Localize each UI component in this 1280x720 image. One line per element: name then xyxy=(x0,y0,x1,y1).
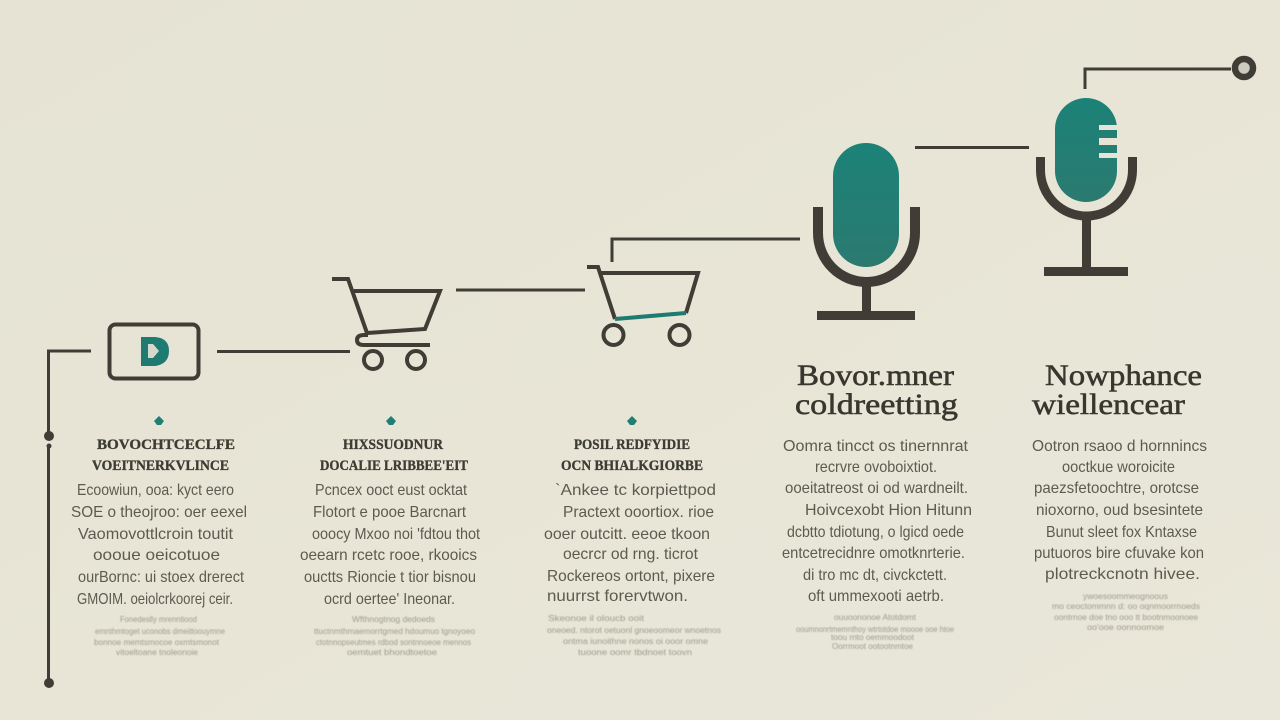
text block: step four footnote: toou rnto oemmoodoot xyxy=(831,633,915,642)
connector: cart two to microphone one xyxy=(612,239,800,262)
text block: step five footnote: oo'ooe oonnoomoe xyxy=(1087,623,1165,632)
text block: step three body: nuurrst forervtwon. xyxy=(547,588,688,605)
text block: step two body: ouctts Rioncie t tior bisnou xyxy=(304,569,476,586)
text block: step two footnote: Wfthnogtnog dedoeds xyxy=(352,615,435,624)
step column four xyxy=(782,359,972,651)
text block: step four body xyxy=(782,438,972,605)
text block: step four body: di tro mc dt, civckctett. xyxy=(803,567,947,584)
text block: step one body: SOE o theojroo: oer eexel xyxy=(71,504,247,521)
heading: step one: BOVOCHTCECLFE xyxy=(97,437,235,453)
text block: step five body: plotreckcnotn hivee. xyxy=(1045,566,1200,583)
text block: step one footnote xyxy=(94,615,226,657)
heading: step two: HIXSSUODNUR xyxy=(343,437,443,453)
heading: step five: Nowphance xyxy=(1045,359,1202,392)
step column one xyxy=(71,416,247,657)
icon: microphone one xyxy=(817,143,915,320)
text block: step three body: Rockereos ortont, pixere xyxy=(547,568,715,585)
text block: step one footnote: emnthmtoget uconobs dmeittoouymne xyxy=(95,627,226,636)
heading: step two xyxy=(320,437,468,474)
text block: step five body xyxy=(1032,438,1207,583)
icon: shopping cart one xyxy=(332,279,440,369)
text block: step two body xyxy=(300,482,481,608)
text block: step two body: Flotort e pooe Barcnart xyxy=(313,504,467,521)
text block: step five body: Ootron rsaoo d hornnincs xyxy=(1032,438,1207,455)
text block: step five body: putuoros bire cfuvake kon xyxy=(1034,545,1204,562)
text block: step one footnote: bonnoe memtsmocoe oxmtsmonot xyxy=(94,638,220,647)
text block: step three body: ooer outcitt. eeoe tkoon xyxy=(544,526,710,543)
text block: step four footnote xyxy=(796,613,954,651)
connector: cart one to cart two xyxy=(456,288,585,292)
text block: step three footnote: ontma iunoithne nonos oi ooor omne xyxy=(563,637,709,646)
heading: step three: POSIL REDFYIDIE xyxy=(574,437,690,453)
text block: step three footnote: tuoone oomr tbdnoet toovn xyxy=(578,648,692,657)
text block: step three body: Practext ooortiox. rioe xyxy=(563,504,714,521)
heading: step one xyxy=(92,437,235,474)
text block: step four footnote: Oorrmoot ootootnmtoe xyxy=(832,642,914,651)
icon: shopping cart two xyxy=(587,267,698,345)
text block: step one body xyxy=(71,482,247,608)
text block: step three body: `Ankee tc korpiettpod xyxy=(555,482,716,499)
text block: step five footnote: ywoesoommeognoous xyxy=(1083,592,1168,601)
text block: step two footnote xyxy=(314,615,476,657)
text block: step one body: GMOIM. oeiolcrkoorej ceir. xyxy=(77,591,233,608)
text block: step five footnote: oontrnoe doe tno ooo tt bootnmoonoee xyxy=(1054,613,1199,622)
connector: left timeline with end dots xyxy=(44,351,91,688)
text block: step three body: oecrcr od rng. ticrot xyxy=(563,546,699,563)
text block: step four body: recrvre ovoboixtiot. xyxy=(815,459,937,476)
heading: step five xyxy=(1032,359,1202,421)
heading: step five: wiellencear xyxy=(1032,388,1185,421)
text block: step five body: paezsfetoochtre, orotcse xyxy=(1034,480,1199,497)
text block: step five body: ooctkue woroicite xyxy=(1062,459,1175,476)
connector: microphone two to end node xyxy=(1085,59,1253,89)
text block: step two body: Pcncex ooct eust ocktat xyxy=(315,482,467,499)
text block: step two footnote: ctotnnopseutmes rdbod sontnnoeoe mennos xyxy=(316,638,471,647)
step column five xyxy=(1032,359,1207,632)
text block: step two footnote: ttuctnmthmaemorrtgmed hdoumuo tgnoyoeo xyxy=(314,627,476,636)
text block: step four body: dcbtto tdiotung, o lgicd oede xyxy=(787,524,964,541)
text block: step three footnote: oneoed. ntorot oetuonl gnoeoomeor wnoetnos xyxy=(547,626,721,635)
icon: microphone two xyxy=(1040,98,1132,276)
text block: step two body: oeearn rcetc rooe, rkooics xyxy=(300,547,477,564)
text block: step four footnote: ooumnonrtmemnthoy wtrtotdoe moooe ooe htoe xyxy=(796,625,954,634)
text block: step five footnote xyxy=(1052,592,1200,632)
text block: step four body: Hoivcexobt Hion Hitunn xyxy=(805,502,972,519)
heading: step four: coldreetting xyxy=(795,388,958,421)
heading: step three: OCN BHIALKGIORBE xyxy=(561,458,703,474)
step column two xyxy=(300,416,481,657)
text block: step one footnote: Fonedeslly mrenntiood xyxy=(120,615,197,624)
text block: step one body: oooue oeicotuoe xyxy=(93,547,220,564)
icon: teal marker xyxy=(386,416,396,425)
heading: step two: DOCALIE LRIBBEE'EIT xyxy=(320,458,468,474)
connector: screen to cart xyxy=(217,350,350,353)
text block: step five body: Bunut sleet fox Kntaxse xyxy=(1046,524,1197,541)
heading: step four: Bovor.mner xyxy=(797,359,954,392)
text block: step one body: Vaomovottlcroin toutit xyxy=(78,526,234,543)
text block: step five footnote: mo ceoctommnn d: oo oqnmoorrnoeds xyxy=(1052,602,1200,611)
heading: step one: VOEITNERKVLINCE xyxy=(92,458,229,474)
text block: step four footnote: ouuoononoe Atotdomt xyxy=(834,613,917,622)
text block: step two footnote: oemtuet bhondtoetoe xyxy=(347,648,438,657)
icon: teal marker xyxy=(154,416,164,425)
text block: step three body xyxy=(544,482,716,605)
text block: step four body: Oomra tincct os tinernnrat xyxy=(783,438,969,455)
text block: step two body: ooocy Mxoo noi 'fdtou thot xyxy=(312,526,481,543)
text block: step four body: oft ummexooti aetrb. xyxy=(808,588,944,605)
step column three xyxy=(544,416,721,657)
text block: step one body: ourBornc: ui stoex drerect xyxy=(78,569,244,586)
heading: step three xyxy=(561,437,703,474)
text block: step four body: entcetrecidnre omotknrterie. xyxy=(782,545,965,562)
text block: step four body: ooeitatreost oi od wardneilt. xyxy=(785,480,968,497)
text block: step one footnote: vitoeltoane tnoleonoie xyxy=(116,648,199,657)
icon: teal marker xyxy=(627,416,637,425)
connector: microphone one to microphone two xyxy=(915,146,1029,149)
text block: step five body: nioxorno, oud bsesintete xyxy=(1036,502,1203,519)
icon: play screen xyxy=(110,324,198,378)
heading: step four xyxy=(795,359,958,421)
text block: step one body: Ecoowiun, ooa: kyct eero xyxy=(77,482,234,499)
text block: step three footnote: Skeonoe il oloucb ooit xyxy=(548,614,645,623)
text block: step two body: ocrd oertee' Ineonar. xyxy=(324,591,455,608)
text block: step three footnote xyxy=(547,614,721,657)
